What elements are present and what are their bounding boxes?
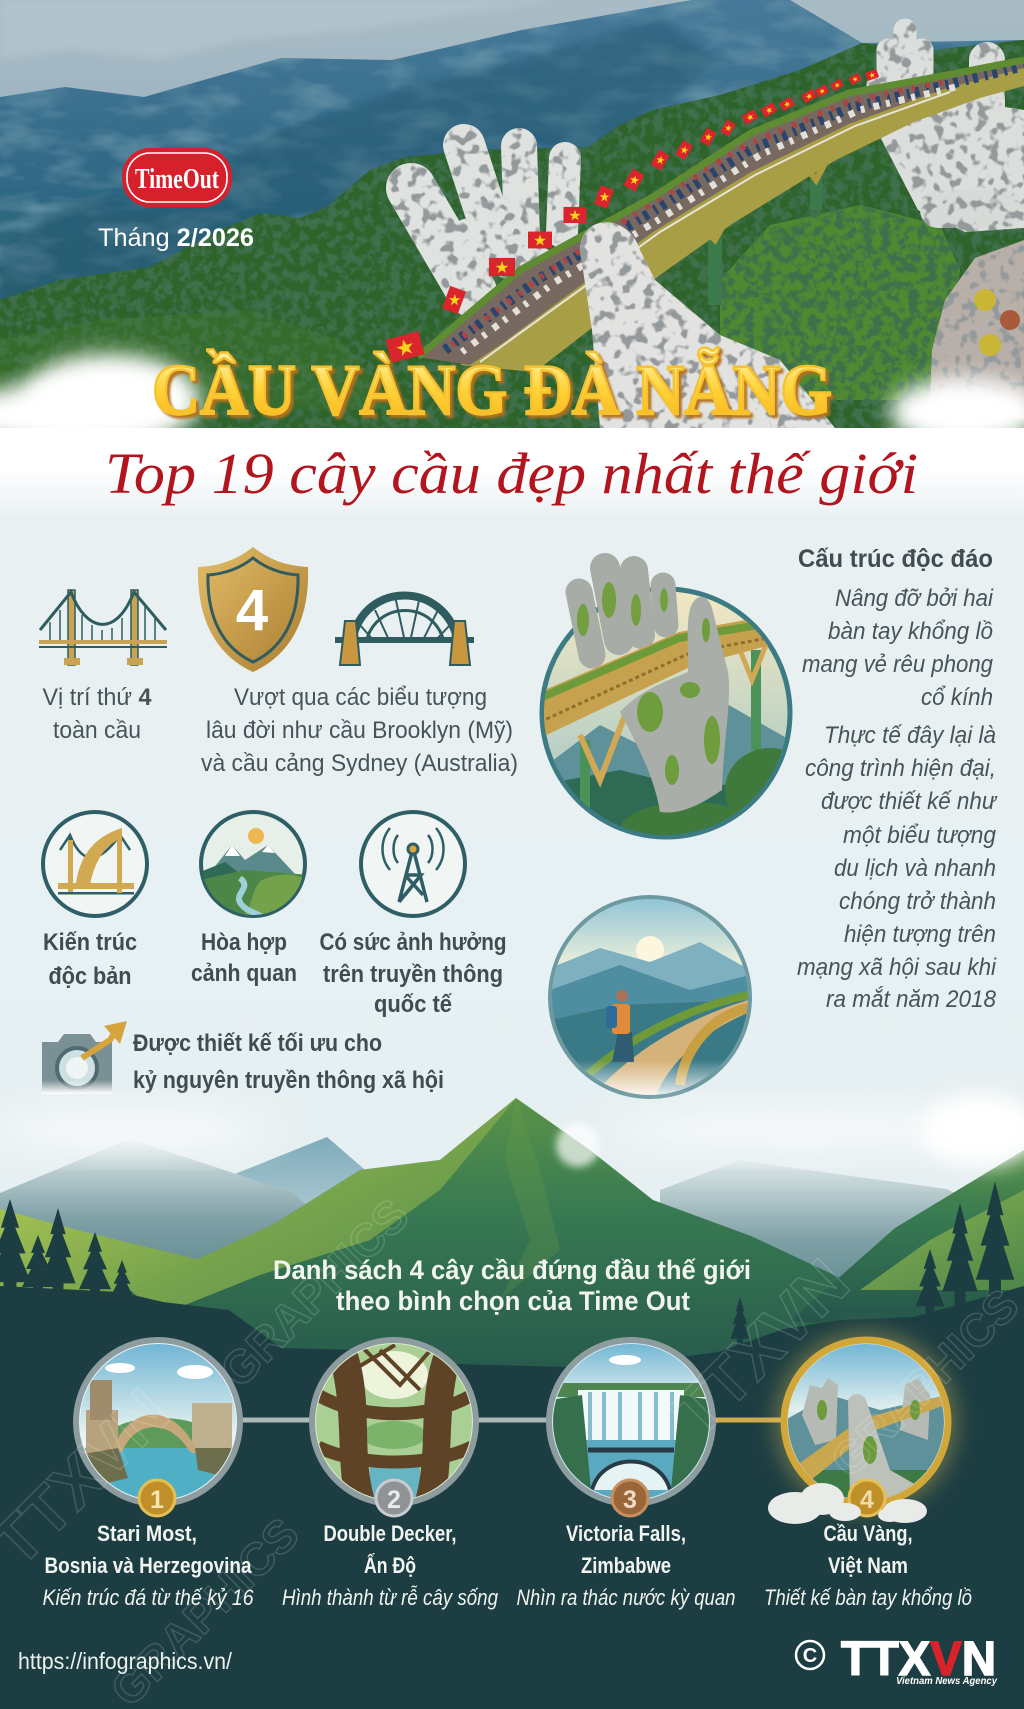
card 2 text: Double Decker, xyxy=(324,1521,456,1546)
text: landscape label xyxy=(191,929,297,987)
text: first paragraph: mang vẻ rêu phong xyxy=(802,651,994,678)
heading: top 4 list: theo bình chọn của Time Out xyxy=(336,1286,690,1316)
rank badge 2: 2 xyxy=(387,1486,401,1514)
card 2 text xyxy=(282,1521,499,1610)
source url: https://infographics.vn/ xyxy=(18,1648,233,1674)
icon: suspension bridge xyxy=(39,590,167,665)
text: social media design xyxy=(133,1030,444,1094)
text: second paragraph: chóng trở thành xyxy=(839,888,996,915)
TTXVN logo: C xyxy=(803,1645,817,1667)
hero photo: Golden Bridge xyxy=(0,0,1024,428)
card 3 text: Nhìn ra thác nước kỳ quan xyxy=(516,1585,736,1610)
icon: gold shield number 4 xyxy=(198,547,308,672)
right hand front thumb xyxy=(920,190,1024,228)
cloud band below hero xyxy=(0,354,1024,518)
text: social media design: kỷ nguyên truyền thông xã hội xyxy=(133,1067,444,1094)
heading: unique structure: Cấu trúc độc đáo xyxy=(798,545,993,573)
card 3: Victoria Falls xyxy=(549,1340,713,1504)
text: media influence label: Có sức ảnh hưởng xyxy=(320,929,506,956)
connector lines xyxy=(242,1418,782,1422)
bridge fascia xyxy=(460,68,1024,372)
text: rank: Vị trí thứ 4 xyxy=(42,684,152,711)
card 1 text: Stari Most, xyxy=(97,1521,197,1546)
icon: unique architecture xyxy=(43,812,147,916)
text: first paragraph xyxy=(802,585,994,711)
watermark xyxy=(0,1189,1024,1709)
rank badge 3: 3 xyxy=(623,1486,637,1514)
card 4 text xyxy=(764,1521,972,1610)
garden path xyxy=(930,240,1024,420)
text: second paragraph: mạng xã hội sau khi xyxy=(797,954,997,981)
card 2 text: Hình thành từ rễ cây sống xyxy=(282,1585,499,1610)
icon: gold shield number 4: 4 xyxy=(236,578,268,643)
illustration: hiker on bridge xyxy=(550,897,750,1100)
card 3 text: Victoria Falls, xyxy=(566,1521,686,1546)
thumb and palm xyxy=(580,222,835,428)
card 4 text: Việt Nam xyxy=(828,1553,908,1578)
text: second paragraph: hiện tượng trên xyxy=(844,921,996,948)
far fingers xyxy=(411,145,565,292)
TTXVN logo: Vietnam News Agency xyxy=(896,1676,997,1687)
card 4: Golden Bridge highlighted xyxy=(774,1330,958,1514)
text: unique structure column xyxy=(797,545,998,1013)
icon: arch bridge xyxy=(335,596,474,665)
rank badge 4 with cloud xyxy=(768,1480,927,1524)
text: rank xyxy=(42,684,152,744)
right hand xyxy=(864,30,1024,232)
card 2: Double Decker xyxy=(312,1340,476,1510)
TimeOut logo xyxy=(122,148,232,207)
TimeOut logo: TimeOut xyxy=(135,164,220,195)
text: unique architecture label: độc bản xyxy=(48,963,132,990)
text: first paragraph: Nâng đỡ bởi hai xyxy=(835,585,994,612)
text: landscape label: cảnh quan xyxy=(191,960,297,987)
text: surpass icons: và cầu cảng Sydney (Australia) xyxy=(201,750,518,777)
heading: top 4 list xyxy=(273,1255,751,1316)
rank badge 4 with cloud: 4 xyxy=(860,1486,874,1514)
card 4 text: Thiết kế bàn tay khổng lồ xyxy=(764,1585,972,1610)
text: second paragraph: ra mắt năm 2018 xyxy=(826,986,997,1013)
card 1 text xyxy=(42,1521,254,1610)
text: second paragraph: du lịch và nhanh xyxy=(834,855,996,882)
text: first paragraph: cổ kính xyxy=(921,684,993,711)
rank badge 3 xyxy=(612,1480,648,1516)
flags xyxy=(385,69,879,363)
card 3 text xyxy=(516,1521,736,1610)
text: surpass icons xyxy=(201,684,518,777)
card 1 text: Bosnia và Herzegovina xyxy=(44,1553,252,1578)
text: landscape label: Hòa hợp xyxy=(201,929,287,956)
text: unique architecture label xyxy=(43,929,137,990)
pillars xyxy=(708,230,722,305)
icon: camera with arrow xyxy=(42,1021,127,1094)
title: CẦU VÀNG ĐÀ NẴNG xyxy=(152,348,832,430)
rank badge 1 xyxy=(139,1480,175,1516)
card 2 text: Ấn Độ xyxy=(364,1553,416,1578)
icon: broadcast tower xyxy=(361,812,465,916)
text: second paragraph: một biểu tượng xyxy=(843,822,997,849)
panel: left facts xyxy=(39,547,518,1094)
bridge walkway xyxy=(418,60,1024,365)
text: rank: toàn cầu xyxy=(53,717,141,744)
text: second paragraph: Thực tế đây lại là xyxy=(824,722,996,749)
watermark: GRAPHICS xyxy=(820,1279,1024,1487)
watermark: GRAPHICS xyxy=(210,1189,419,1397)
mountain landscape xyxy=(0,1094,1024,1709)
forest xyxy=(0,40,1024,428)
rank badge 2 xyxy=(376,1480,412,1516)
text: second paragraph xyxy=(797,722,998,1013)
card 1 text: Kiến trúc đá từ thế kỷ 16 xyxy=(42,1585,254,1610)
text: media influence label: trên truyền thông xyxy=(323,961,503,988)
text: first paragraph: bàn tay khổng lồ xyxy=(828,618,993,645)
TTXVN logo: TTXVN xyxy=(841,1633,996,1686)
heading: top 4 list: Danh sách 4 cây cầu đứng đầu thế giới xyxy=(273,1255,751,1285)
icon: landscape harmony xyxy=(200,812,310,920)
dark forest xyxy=(0,1286,1024,1709)
text: media influence label: quốc tế xyxy=(374,991,453,1018)
text: media influence label xyxy=(320,929,506,1018)
rank badge 1: 1 xyxy=(150,1486,164,1514)
mist xyxy=(0,1108,270,1152)
text: second paragraph: công trình hiện đại, xyxy=(805,755,996,782)
text: social media design: Được thiết kế tối ưu cho xyxy=(133,1030,382,1057)
watermark: TTXVN xyxy=(658,1245,863,1450)
text: unique architecture label: Kiến trúc xyxy=(43,929,137,956)
card 3 text: Zimbabwe xyxy=(581,1553,671,1578)
text: surpass icons: lâu đời như cầu Brooklyn (Mỹ) xyxy=(206,717,513,744)
text: surpass icons: Vượt qua các biểu tượng xyxy=(234,684,487,711)
subtitle: Top 19 cây cầu đẹp nhất thế giới xyxy=(105,441,918,506)
date: Tháng 2/2026 xyxy=(98,224,254,252)
card 4 text: Cầu Vàng, xyxy=(824,1521,912,1546)
card 1: Stari Most xyxy=(76,1340,240,1510)
text: second paragraph: được thiết kế như xyxy=(821,788,998,815)
illustration: mossy hand holding bridge xyxy=(540,568,815,858)
